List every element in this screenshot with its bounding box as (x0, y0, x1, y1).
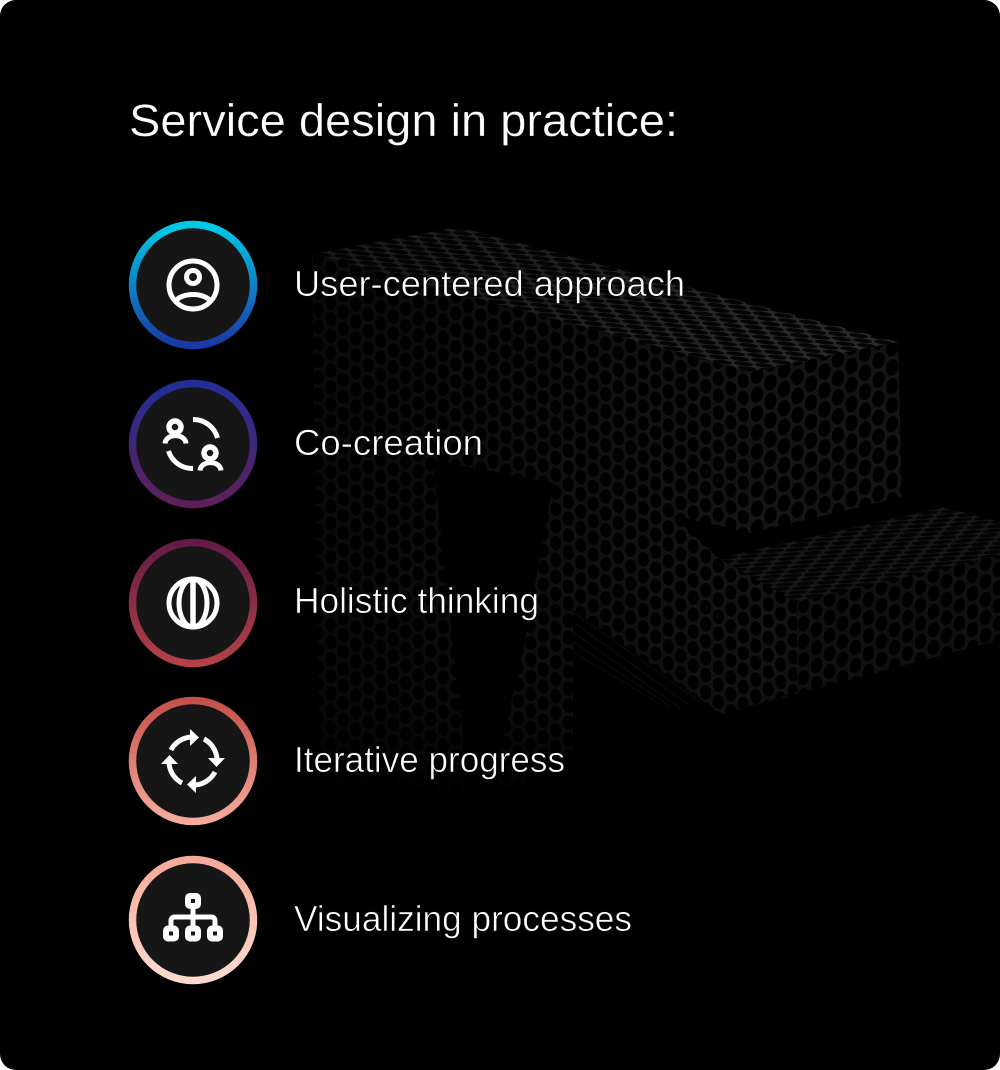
block top face (312, 227, 898, 372)
label: iterative progress: Iterative progress (294, 739, 565, 780)
item: visualizing processes (132, 860, 632, 980)
title: Service design in practice: (129, 95, 678, 146)
icon: two people exchanging (132, 384, 254, 504)
background: dotted 3D block shape (312, 227, 1000, 800)
block front face with legs (312, 254, 797, 800)
item: holistic thinking (132, 542, 539, 664)
icon: globe (132, 542, 254, 664)
label: visualizing processes: Visualizing processes (294, 898, 632, 939)
icon: cycle arrows (132, 700, 254, 822)
icon: user in circle (132, 224, 254, 346)
label: user-centered approach: User-centered approach (294, 263, 685, 304)
item: co-creation (132, 384, 483, 504)
block underside hatch (573, 612, 700, 708)
item: iterative progress (132, 700, 565, 822)
lower block front face (722, 555, 1000, 714)
block right face (750, 342, 902, 533)
label: co-creation: Co-creation (294, 422, 483, 463)
item: user-centered approach (132, 224, 685, 346)
label: holistic thinking: Holistic thinking (294, 580, 539, 621)
lower block top face (718, 507, 1000, 602)
icon: hierarchy diagram (132, 860, 254, 980)
